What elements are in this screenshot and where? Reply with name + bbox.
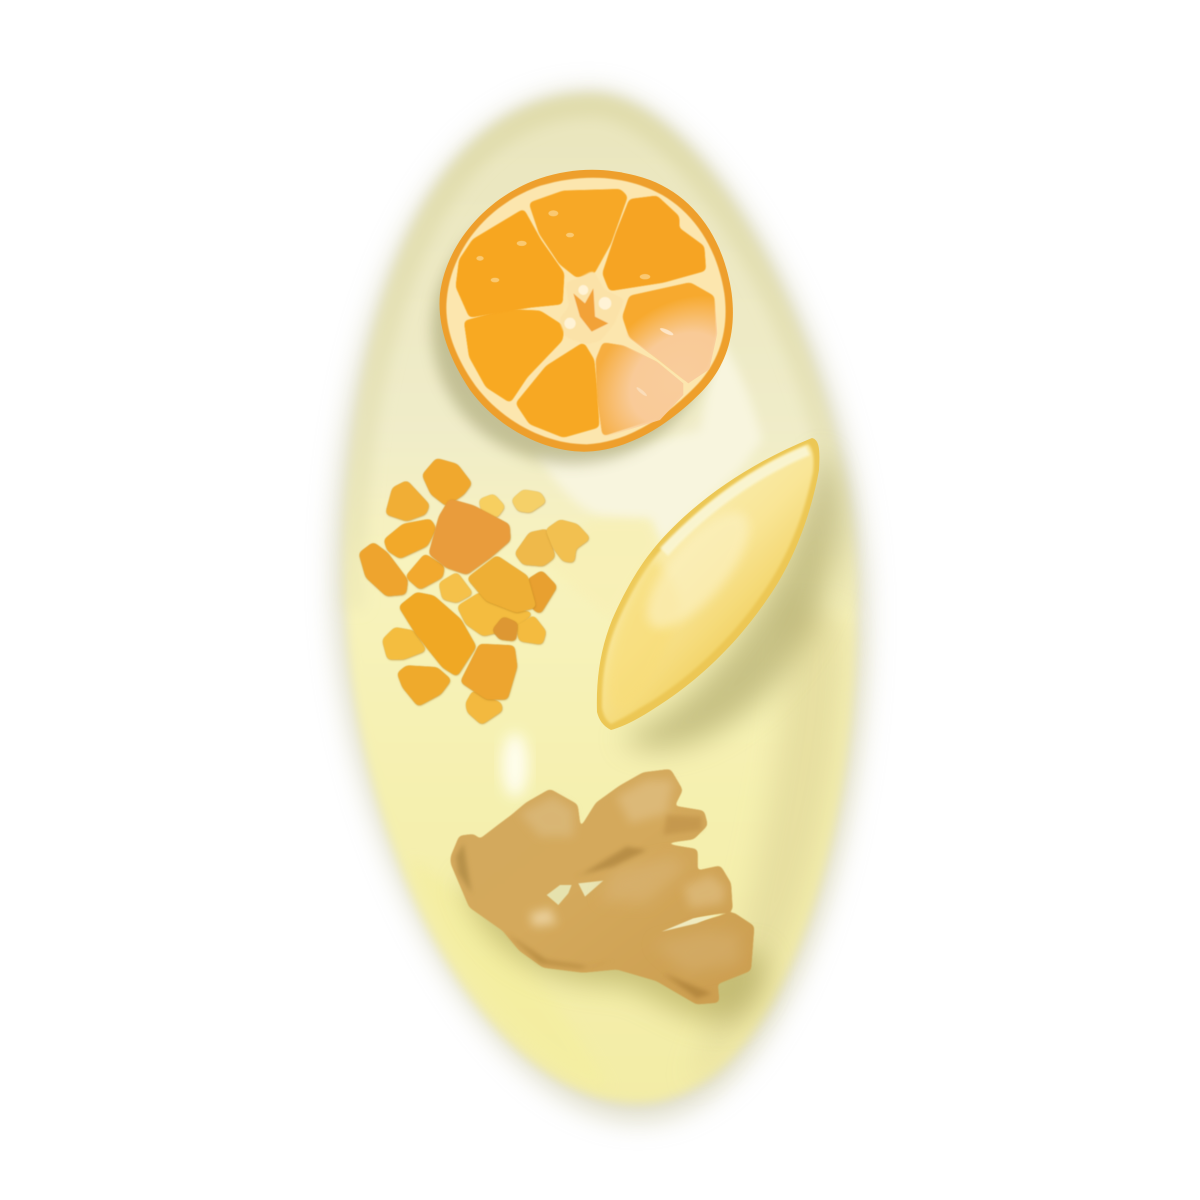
lemon wedge	[597, 438, 819, 730]
dish: yellow oval plate	[345, 98, 856, 1103]
orange pith	[446, 178, 726, 444]
illustration: ingredients on an oval dish	[321, 78, 880, 1134]
ginger root	[452, 770, 753, 1003]
dish: bright yellow lower-left	[410, 860, 610, 1090]
dish: right-hand toning	[690, 600, 846, 1085]
ginger body	[452, 770, 753, 1003]
lemon pale upper rim	[660, 446, 810, 556]
orange pulp detail	[476, 210, 674, 397]
orange peach glare	[596, 298, 718, 434]
orange segments	[457, 190, 715, 437]
orange core	[560, 272, 623, 343]
lemon flesh	[602, 444, 813, 724]
orange rind	[439, 170, 733, 452]
shadow: orange	[432, 196, 712, 464]
lemon pulp glare	[630, 497, 766, 643]
ginger gaps	[547, 881, 717, 932]
rock sugar pile	[360, 459, 589, 723]
lemon lower-left flesh	[606, 558, 680, 710]
shadow: lemon wedge	[620, 450, 839, 749]
lemon rind	[597, 438, 819, 730]
dish: cast shadow	[335, 92, 866, 1120]
dish: darker upper rim	[353, 106, 848, 610]
ginger light and dark modelling	[456, 780, 740, 998]
dish: glossy highlights	[502, 335, 762, 797]
shadow: ginger	[462, 880, 765, 1022]
orange half	[439, 170, 798, 495]
